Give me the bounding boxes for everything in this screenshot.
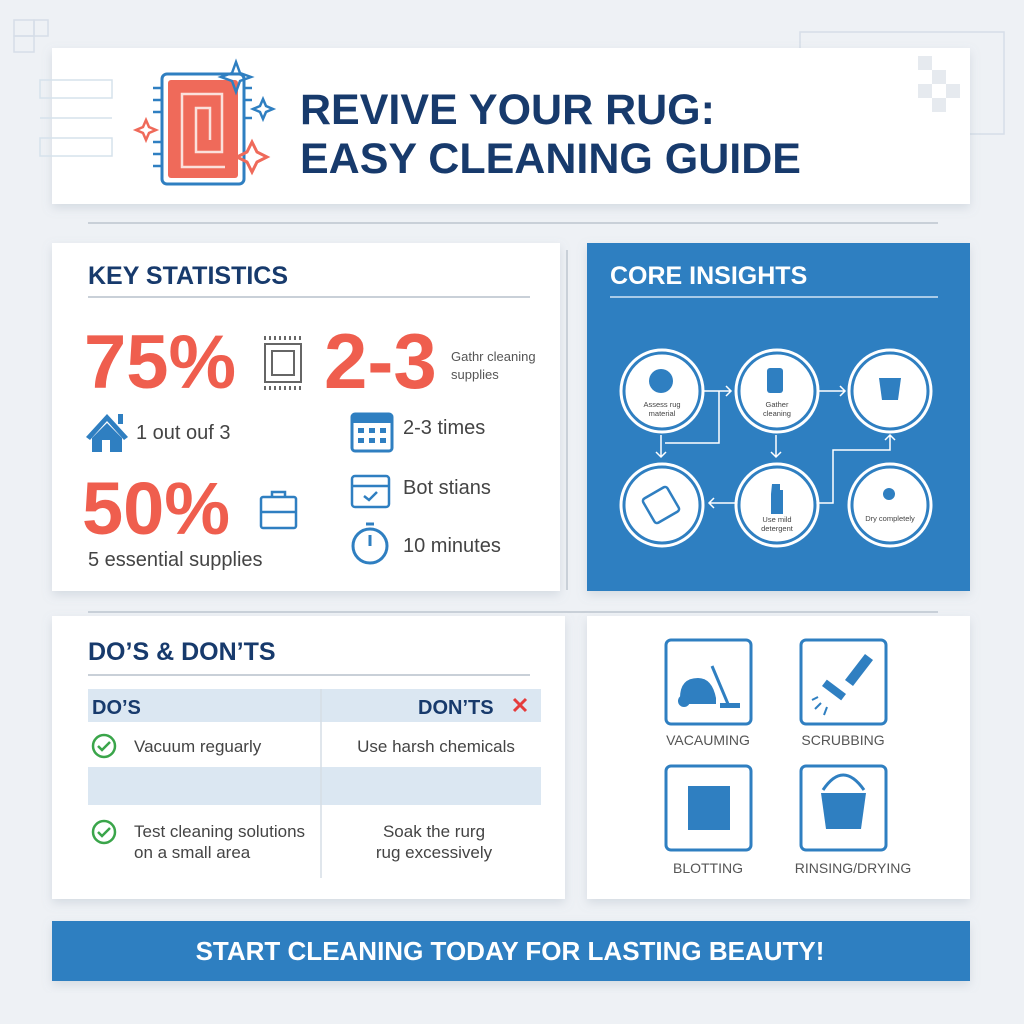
panel: key statistics: Bot stians: [403, 477, 491, 499]
icon: stopwatch: [353, 524, 387, 563]
row: vacuum: [93, 735, 515, 757]
header card: [40, 48, 970, 204]
panel: key statistics: 10 minutes: [403, 535, 501, 557]
column: do's: DO’S: [92, 697, 141, 719]
icon: brush: [812, 654, 873, 715]
panel: do's and don'ts: [52, 616, 565, 899]
icon: chip: [265, 336, 301, 390]
panel: techniques: [587, 616, 970, 899]
panel: core insights: detergent: [761, 524, 794, 533]
icon: cloth: [688, 786, 730, 830]
title: EASY CLEANING GUIDE: [300, 135, 801, 183]
panel: core insights: cleaning: [763, 409, 791, 418]
panel: techniques: SCRUBBING: [801, 732, 885, 748]
footer banner: START CLEANING TODAY FOR LASTING BEAUTY!: [196, 936, 824, 966]
flow nodes: [624, 353, 928, 543]
row: test: [93, 821, 493, 862]
icon: calendar: [352, 414, 392, 451]
row: vacuum: Use harsh chemicals: [357, 737, 515, 756]
row: test: on a small area: [134, 843, 251, 862]
panel: key statistics: [52, 243, 560, 591]
row: test: Test cleaning solutions: [134, 822, 305, 841]
panel: core insights: Assess rug: [643, 400, 681, 409]
icon: calendar check: [352, 476, 389, 507]
column: don'ts: DON’TS: [418, 697, 494, 719]
stat: 50%: 50%: [82, 467, 230, 550]
panel: key statistics: 5 essential supplies: [88, 549, 263, 571]
icon: vacuum: [678, 666, 740, 708]
panel: techniques: BLOTTING: [673, 860, 743, 876]
icon: toolbox: [261, 492, 296, 528]
icon: bucket: [821, 775, 866, 829]
title: REVIVE YOUR RUG:: [300, 86, 715, 134]
panel: techniques: RINSING/DRYING: [795, 860, 911, 876]
stat: 2-3: 2-3: [324, 317, 437, 405]
heading: do's & don'ts: DO’S & DON’TS: [88, 638, 276, 666]
panel: core insights: material: [649, 409, 676, 418]
stat: 75%: 75%: [84, 320, 236, 405]
panel: core insights: Gather: [766, 400, 789, 409]
heading: key statistics: KEY STATISTICS: [88, 262, 288, 290]
icon: rug: [136, 62, 273, 184]
panel: core insights: Dry completely: [865, 514, 915, 523]
panel: core insights: [587, 243, 970, 591]
title: [300, 86, 801, 183]
panel: key statistics: 2-3 times: [403, 417, 485, 439]
row: vacuum: Vacuum reguarly: [134, 737, 262, 756]
icon: house: [86, 414, 128, 452]
panel: key statistics: 1 out ouf 3: [136, 422, 231, 444]
heading: core insights: CORE INSIGHTS: [610, 262, 807, 290]
column: don'ts: [418, 697, 526, 719]
row: test: Soak the rurg: [383, 822, 485, 841]
panel: core insights: Use mild: [762, 515, 792, 524]
footer banner: [52, 921, 970, 981]
panel: key statistics: supplies: [451, 367, 499, 382]
flow arrows: [656, 386, 895, 508]
panel: key statistics: Gathr cleaning: [451, 349, 536, 364]
row: test: rug excessively: [376, 843, 493, 862]
panel: techniques: VACAUMING: [666, 732, 750, 748]
